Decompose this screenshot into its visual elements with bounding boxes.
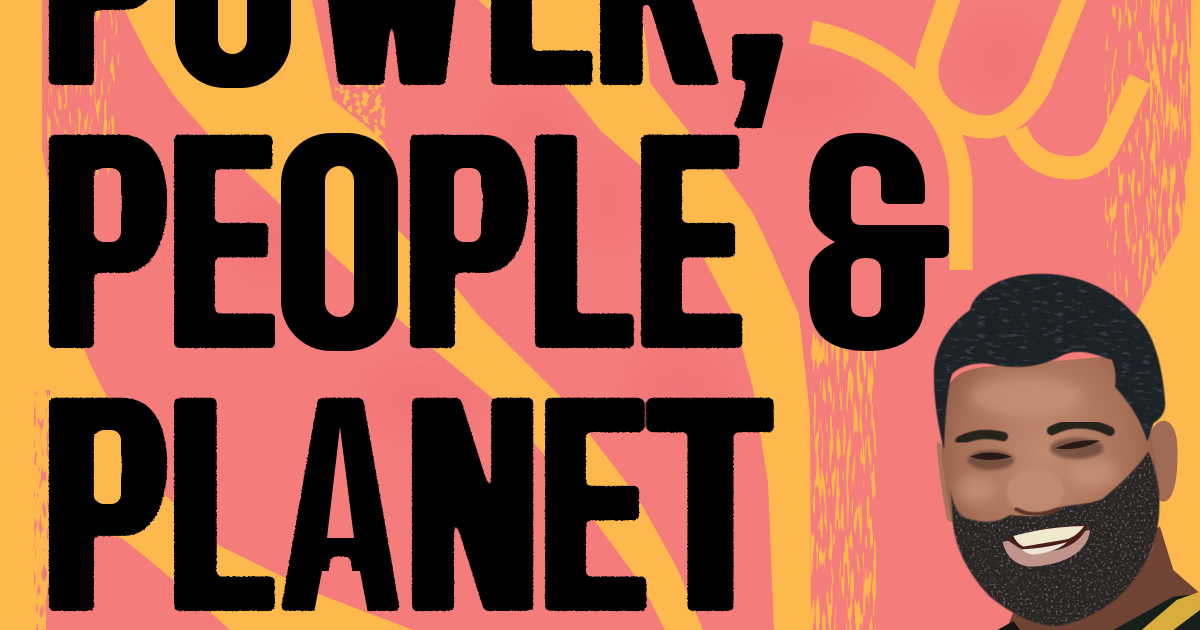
nose shadow: [1015, 508, 1060, 514]
background: orange curved band two: [478, 0, 811, 630]
title: Power, People & Planet: E: [641, 69, 738, 415]
title: Power, People & Planet: P: [408, 69, 524, 415]
mouth opening: [1006, 525, 1088, 552]
background: orange diagonal band one: [118, 0, 703, 630]
shirt collar: [1113, 593, 1200, 630]
mouth lower lip: [1003, 530, 1090, 567]
background: lower left pink patch: [46, 525, 230, 630]
texture: orange specks beside band two: [811, 330, 876, 630]
eye shadows: [967, 438, 1103, 470]
texture: orange splatter near centre: [335, 85, 385, 145]
face: [942, 357, 1160, 627]
title: Power, People & Planet: P: [47, 69, 163, 415]
gold collar trim: [1142, 592, 1200, 630]
cheek highlights: [957, 377, 1117, 503]
teeth: [1013, 526, 1084, 547]
title: Power, People & Planet: L: [535, 68, 629, 414]
ear right: [1150, 421, 1177, 502]
texture: orange specks under title left: [44, 10, 119, 175]
hair: [934, 274, 1165, 450]
neck and chest: [1007, 527, 1200, 630]
texture: orange specks right edge: [1105, 0, 1200, 300]
title: Power, People & Planet: O: [297, 40, 382, 442]
eyes: [970, 440, 1100, 460]
texture: pink specks on left strip: [34, 390, 50, 630]
texture: darker brushed patches: [235, 20, 1045, 435]
shirt: [997, 621, 1020, 630]
lower teeth: [1022, 542, 1067, 555]
nose: [1007, 468, 1063, 515]
title: Power, People & Planet: [47, 0, 947, 630]
ear left: [937, 442, 953, 523]
eyebrows: [960, 424, 1110, 441]
title: Power, People & Planet: &: [808, 50, 947, 432]
title: Power, People & Planet: E: [174, 69, 271, 415]
beard grey speckle: [947, 450, 1163, 627]
hair strand texture: [930, 270, 1170, 450]
portrait: smiling man with beard: [930, 270, 1200, 630]
beard: [951, 452, 1159, 626]
background: orange lower band: [60, 400, 413, 630]
icon: fist finger outlines: [811, 0, 1140, 270]
